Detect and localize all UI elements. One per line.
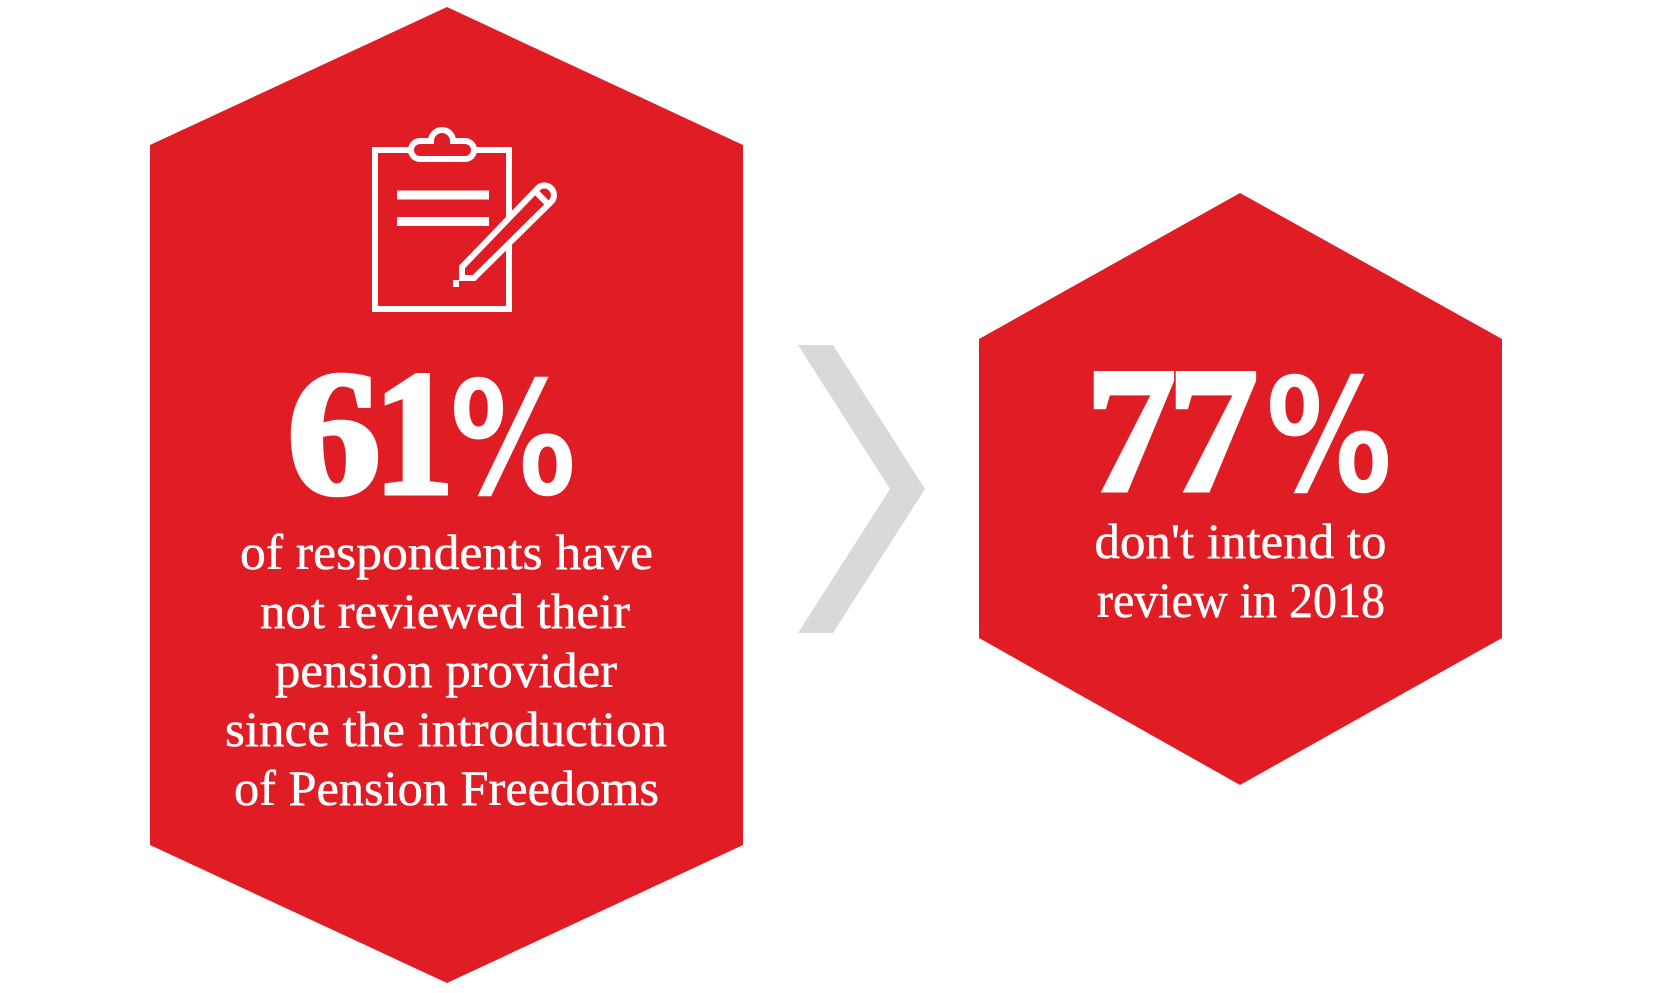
text: respondents description: not reviewed their — [260, 583, 630, 639]
stat: 61%: 1 — [374, 334, 454, 532]
stat: 77%: % — [1266, 345, 1392, 529]
panel: left hexagon — [150, 7, 743, 983]
stat: 61%: % — [450, 348, 576, 532]
text: review intention description — [1094, 513, 1386, 628]
stat: 77% — [1086, 331, 1392, 529]
text: review intention description: review in 2018 — [1097, 572, 1385, 628]
text: respondents description: of respondents have — [240, 524, 653, 580]
stat: 61%: 6 — [287, 334, 381, 532]
panel: right hexagon — [979, 193, 1502, 785]
stat: 61% — [287, 334, 576, 532]
text: respondents description: of Pension Freedoms — [234, 760, 659, 816]
stat: 77%: 7 — [1086, 331, 1176, 529]
text: respondents description: since the introduction — [225, 701, 667, 757]
arrow: chevron — [798, 345, 925, 633]
stat: 77%: 7 — [1168, 331, 1258, 529]
icon: clipboard with pencil — [375, 130, 554, 309]
text: review intention description: don't intend to — [1094, 513, 1386, 569]
text: respondents description: pension provider — [275, 642, 617, 698]
text: respondents description — [225, 524, 667, 816]
